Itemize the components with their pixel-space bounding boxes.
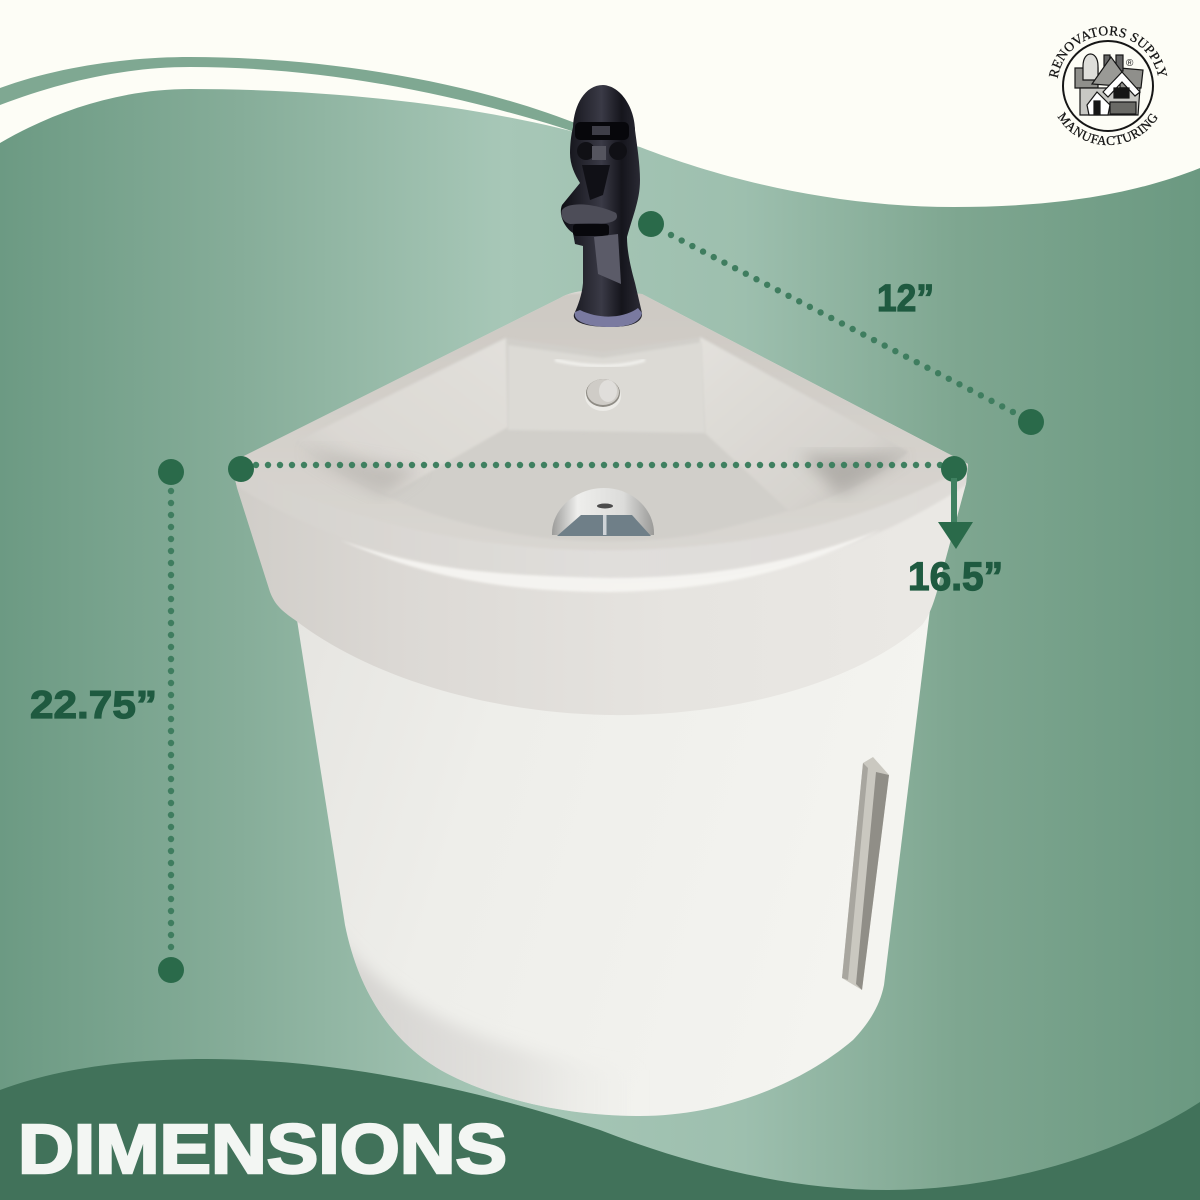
basin lower rim [220,280,980,730]
basin left wall [324,339,507,480]
label: 12 inches: 12” [877,278,934,320]
logo house [1075,54,1143,115]
basin upper rim band [235,456,968,564]
logo registered mark: ® [1126,58,1134,69]
basin floor [295,337,908,541]
basin back wall [508,342,705,433]
logo ring text bottom: MANUFACTURING [1057,112,1158,146]
basin floor shadows [320,452,413,495]
cabinet body [297,610,930,1116]
label: 16.5 inches: 16.5” [908,555,1003,599]
bottom wave band [0,1059,1200,1200]
cabinet lower shading [352,952,552,1108]
top wave accent strip [0,57,585,132]
logo: Renovators Supply Manufacturing [1048,26,1168,146]
sink vanity [220,85,980,1130]
label: 22.75 inches: 22.75” [30,684,157,727]
faucet [561,85,642,327]
basin shell [220,280,980,730]
basin right wall [700,338,832,474]
overflow hole [585,379,621,411]
back wall highlights [555,360,645,366]
door handle [842,757,889,990]
title: DIMENSIONS [18,1110,507,1188]
dimension: width 16.5 inches [228,456,1003,599]
basin deck [225,290,972,550]
dimension: depth 12 inches [638,211,1044,435]
drain [552,488,654,536]
arrow down [938,478,973,549]
logo ring text top: RENOVATORS SUPPLY [1048,26,1168,78]
dimension: height 22.75 inches [30,459,184,983]
basin rim highlight [340,530,880,592]
